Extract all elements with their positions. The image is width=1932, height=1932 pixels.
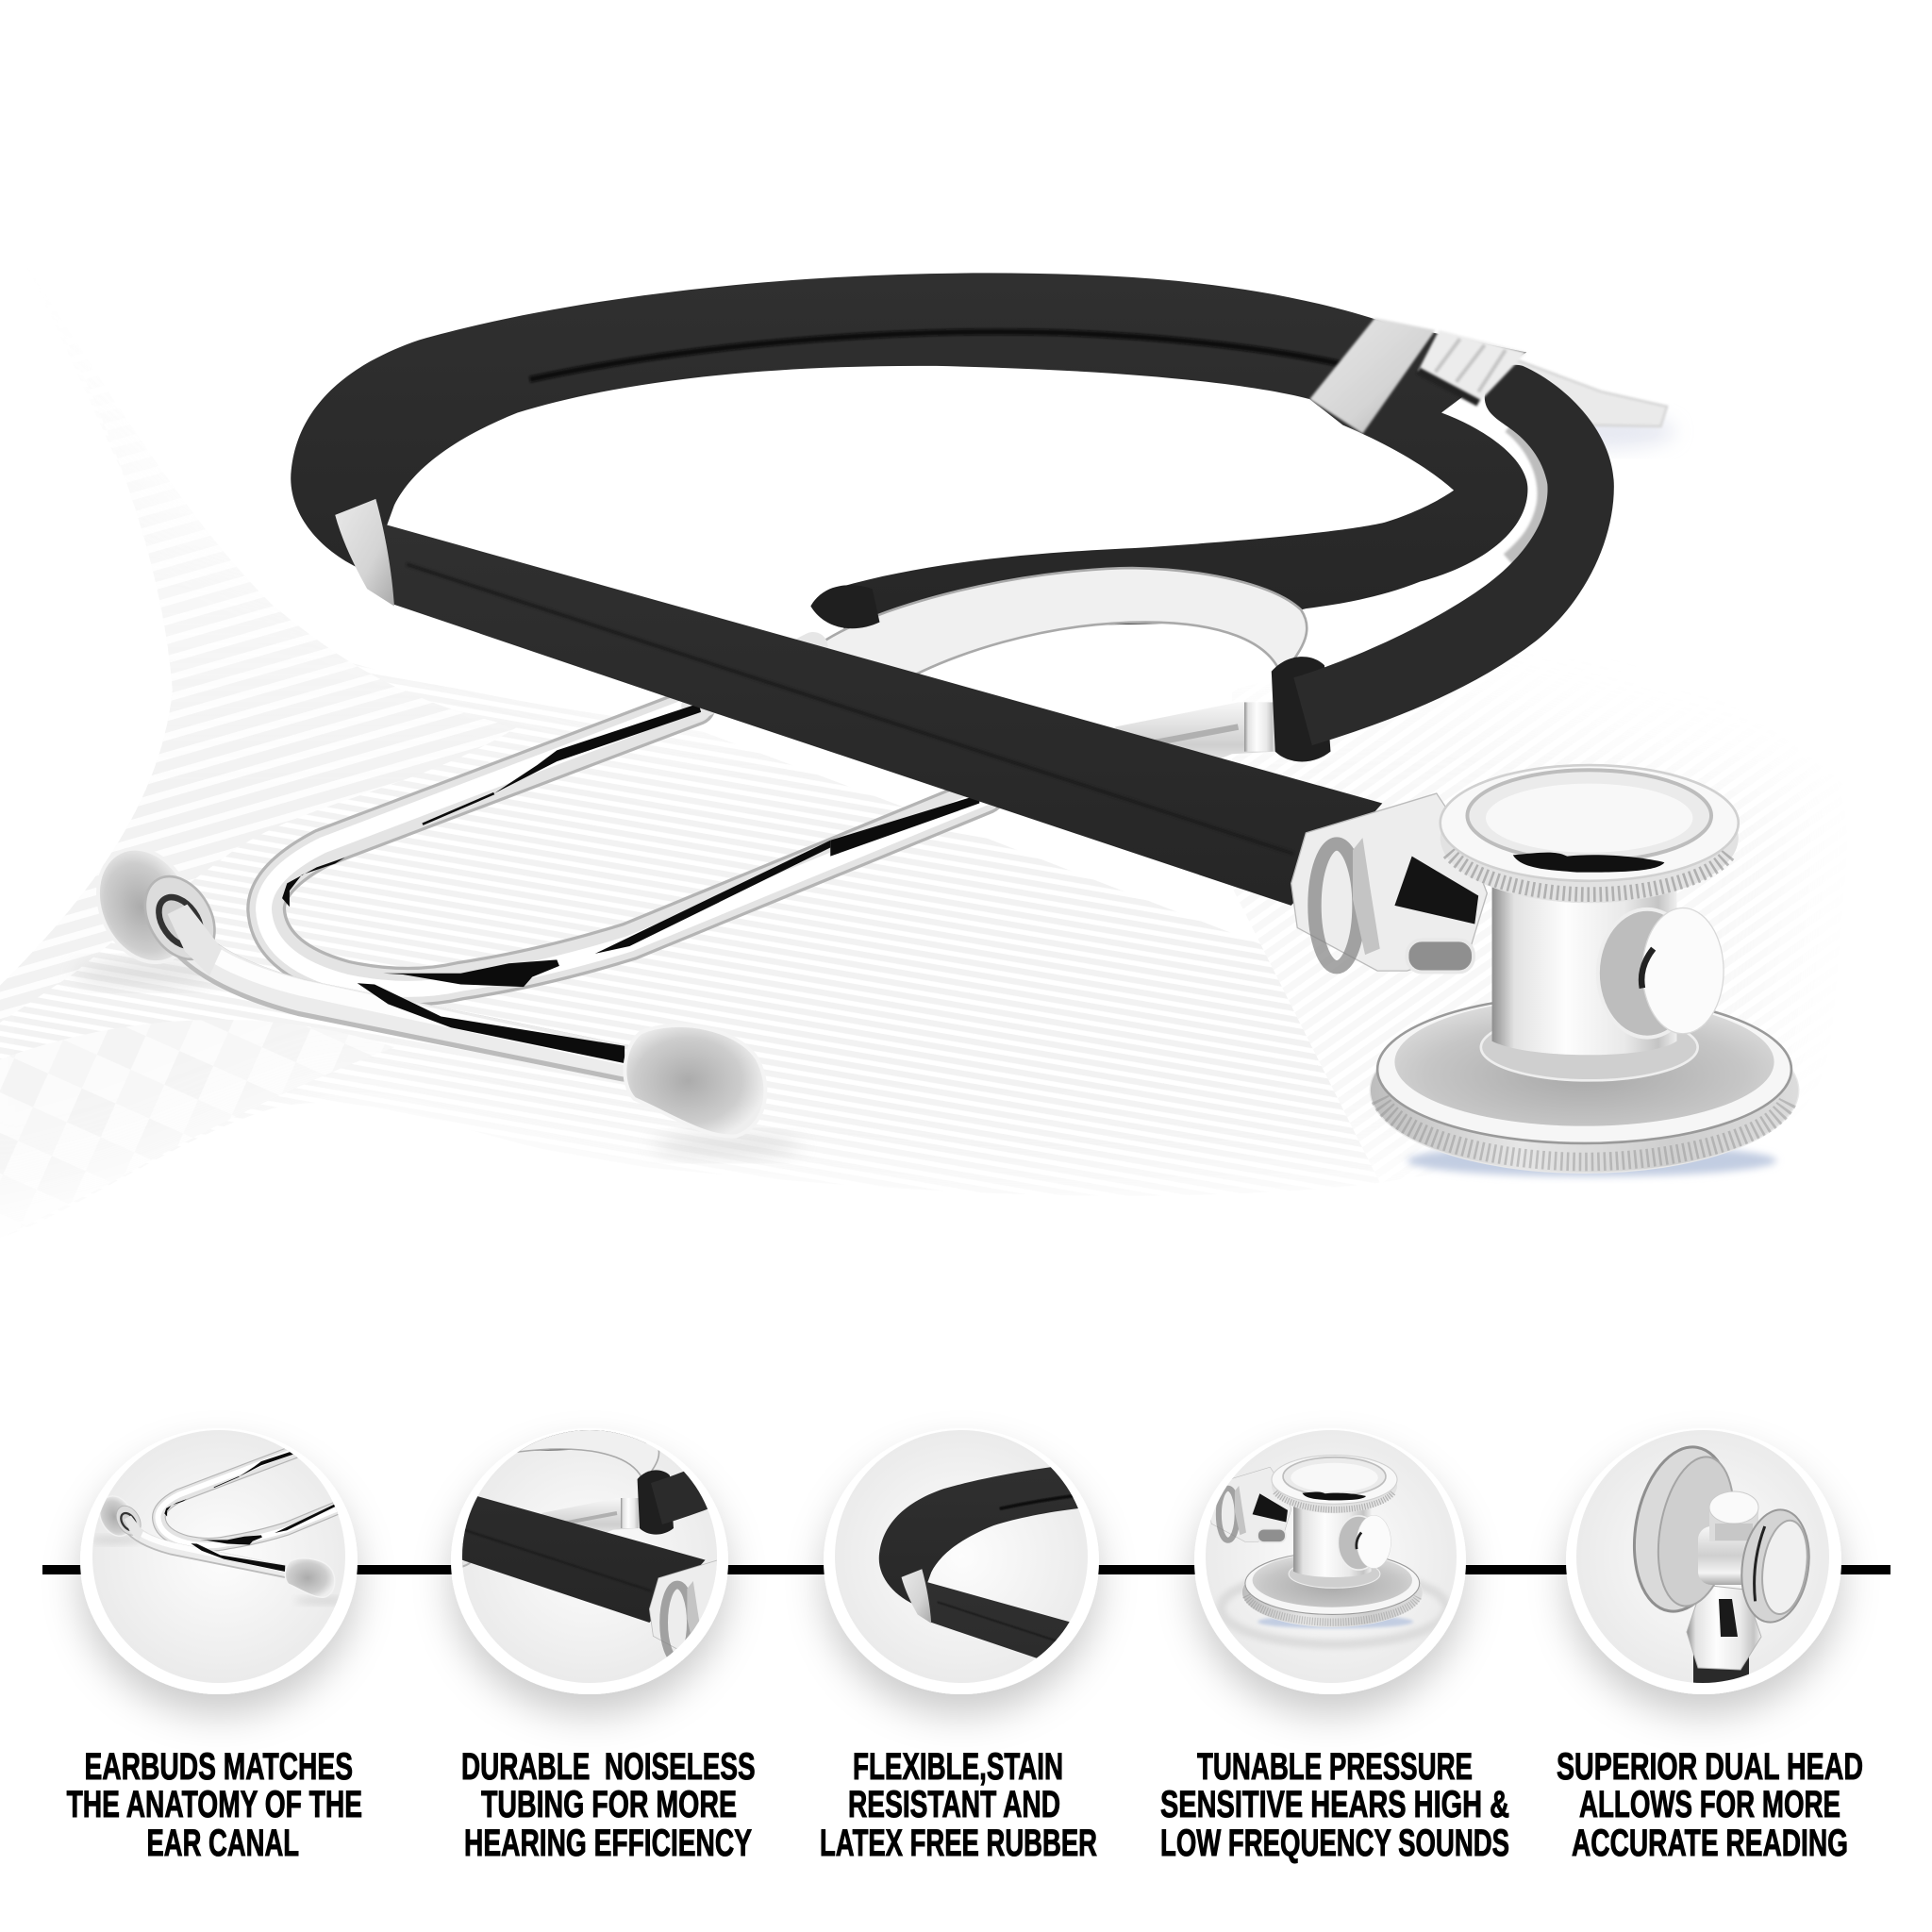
caption [1557,1746,1863,1864]
top ring [1441,765,1739,903]
feature 1: earbuds [64,1430,374,1857]
background wave pattern [0,584,1361,1169]
caption: HEARING EFFICIENCY [464,1823,752,1864]
feature 5: dual head [1557,1424,1863,1864]
silver band right [1309,318,1435,434]
left ear tip [80,833,228,978]
caption: SENSITIVE HEARS HIGH & [1160,1784,1509,1825]
medallion photo [462,1430,717,1683]
caption: DURABLE NOISELESS [461,1746,756,1788]
earbud tube reflection [358,983,625,1063]
medallion ring [80,1428,358,1694]
medallion photo [92,1430,345,1683]
diaphragm disc side view [1632,1445,1733,1613]
black tube end [1693,1655,1749,1683]
rubber joiner left [810,585,879,628]
caption: EARBUDS MATCHES [85,1746,353,1788]
caption: FLEXIBLE,STAIN [853,1746,1063,1788]
silver band left [335,499,394,607]
main stethoscope illustration [74,273,1799,1176]
medallion photo [1206,1430,1457,1683]
earbud tube [181,926,625,1063]
rubber joiner right [1272,657,1330,761]
medallion ring [1566,1428,1841,1694]
feature 3: rubber [808,1430,1115,1857]
metal stem to right joiner [1115,702,1275,789]
caption: LOW FREQUENCY SOUNDS [1160,1823,1509,1864]
main tube groove [407,564,1293,854]
black wedge [1719,1599,1738,1637]
caption: TUBING FOR MORE [481,1784,737,1825]
medallion ring [824,1428,1099,1694]
black tube: upper loop and return tube [291,273,1527,641]
caption: TUNABLE PRESSURE [1197,1746,1473,1788]
disc shadow [1407,1144,1776,1176]
feature 2: tubing [434,1430,755,1857]
tube groove [530,332,1356,379]
medallion photo [1571,1424,1840,1689]
chest head [1291,765,1799,1176]
caption: LATEX FREE RUBBER [820,1823,1097,1864]
binaural chrome tube [263,647,986,989]
chest tube connector behind coil [1509,358,1667,426]
caption [67,1746,362,1864]
medallion photo [835,1430,1088,1683]
caption: EAR CANAL [147,1823,299,1864]
stem collar [1481,1014,1698,1080]
coil spring [1418,330,1526,403]
lens ring side view [1740,1508,1810,1624]
medallion ring [1194,1428,1466,1694]
divider line [42,1565,1890,1574]
stem cylinder [1492,881,1676,1055]
side knob [1598,908,1724,1038]
caption [1160,1746,1509,1864]
lower yoke [1687,1585,1761,1670]
top knob [1709,1491,1758,1541]
black tube: right return [1293,365,1614,745]
contact shadows [74,414,1675,1157]
caption [820,1746,1097,1864]
metal spring plate [816,568,1307,690]
feature 4: tunable head [1160,1424,1509,1864]
diaphragm disc [1370,995,1799,1173]
caption: THE ANATOMY OF THE [67,1784,362,1825]
caption: RESISTANT AND [848,1784,1060,1825]
chrome reflections [282,704,979,987]
black tube: main diagonal [335,518,1382,906]
right ear tip [625,1025,765,1137]
stem [1698,1526,1747,1585]
caption [461,1746,756,1864]
medallion ring [451,1428,728,1694]
yoke [1291,793,1487,972]
